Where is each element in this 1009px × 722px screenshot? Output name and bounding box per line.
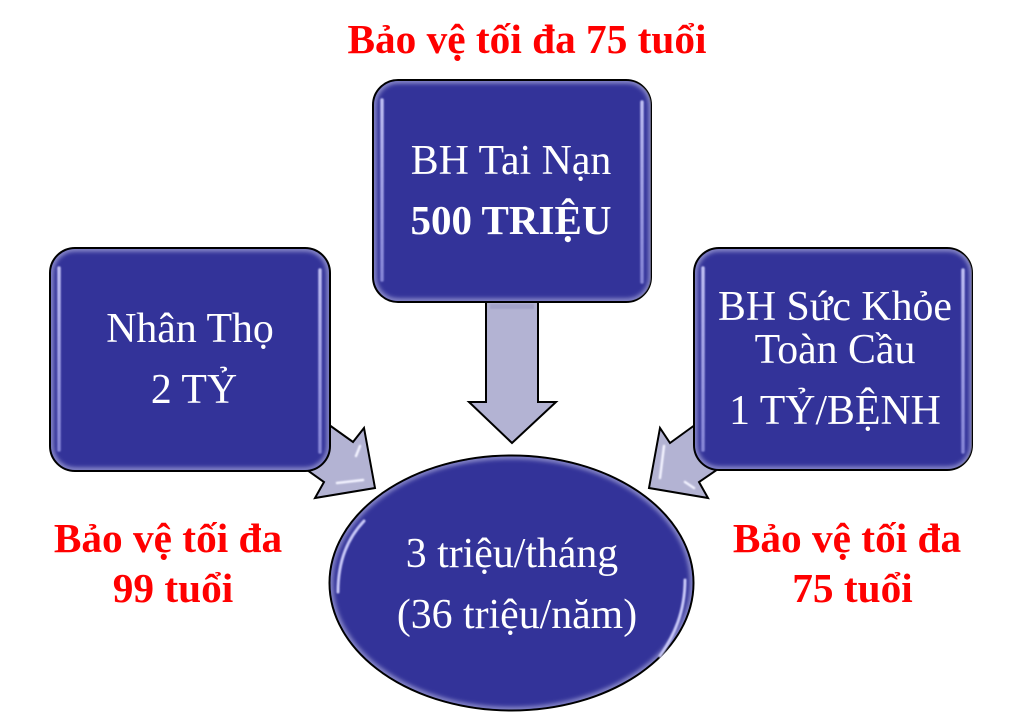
callout: left protection age: [54, 515, 282, 611]
life insurance label: Nhân Thọ: [106, 306, 274, 352]
callout: right protection age: Bảo vệ tối đa: [733, 515, 961, 561]
panel: global health insurance: [694, 248, 972, 470]
callout: right protection age: 75 tuổi: [792, 565, 913, 611]
global health insurance label: BH Sức Khỏe: [718, 284, 952, 330]
panel: life insurance: [50, 248, 330, 471]
callout: left protection age: Bảo vệ tối đa: [54, 515, 282, 561]
arrow: right box to premium: [649, 422, 724, 498]
monthly premium: 3 triệu/tháng: [406, 531, 618, 577]
callout: left protection age: 99 tuổi: [113, 565, 233, 611]
global health insurance label line 2: Toàn Cầu: [755, 327, 915, 373]
accident insurance label: BH Tai Nạn: [411, 138, 611, 184]
arrow: left box to premium: [300, 422, 375, 498]
arrow: center box to premium: [469, 300, 556, 443]
panel: accident insurance: [373, 80, 651, 302]
heading: top protection age: Bảo vệ tối đa 75 tuổi: [347, 16, 707, 62]
callout: right protection age: [733, 515, 961, 611]
panel: premium ellipse: [330, 456, 694, 710]
global health insurance amount: 1 TỶ/BỆNH: [729, 387, 941, 434]
life insurance amount: 2 TỶ: [151, 366, 237, 413]
accident insurance amount: 500 TRIỆU: [411, 197, 611, 243]
annual premium: (36 triệu/năm): [397, 592, 637, 638]
